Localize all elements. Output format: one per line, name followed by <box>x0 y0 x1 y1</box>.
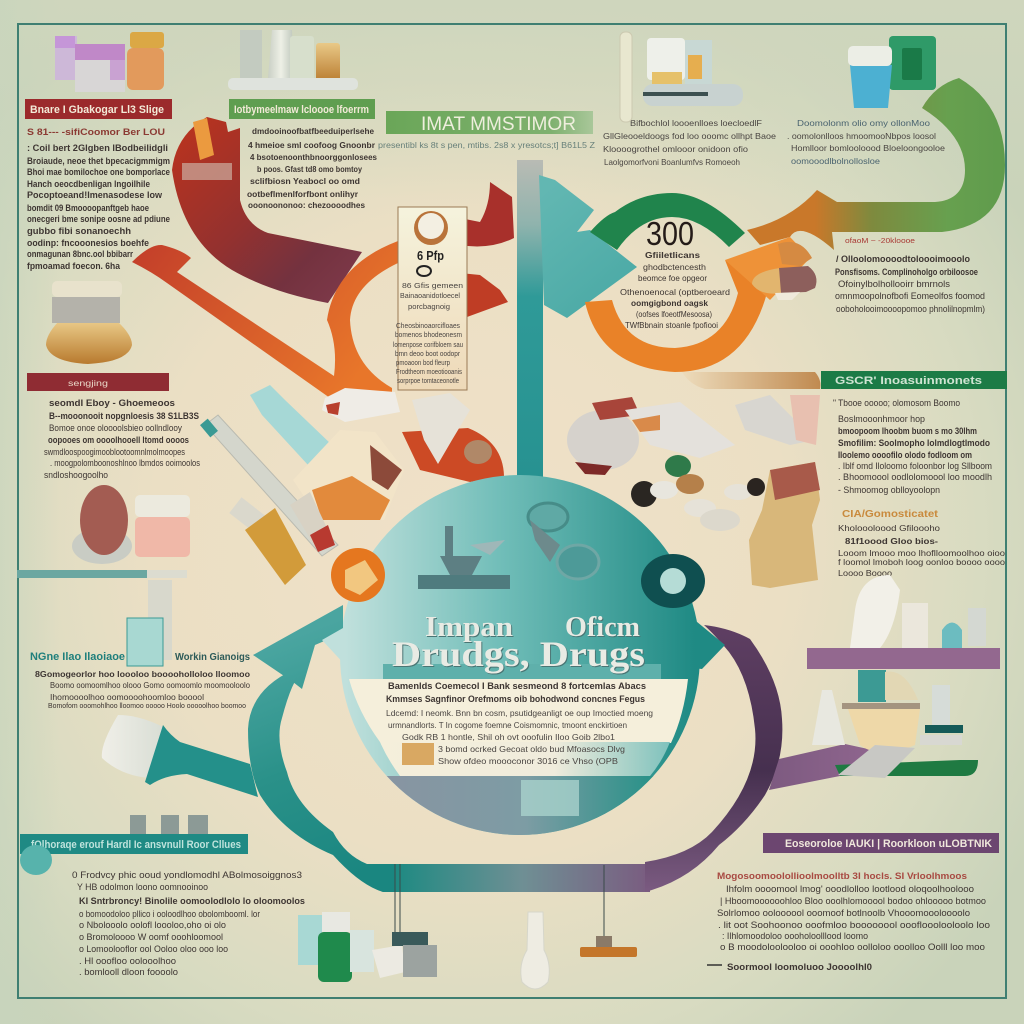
text block: right lower: f loomol lmoboh loog oonloo boooo oooo <box>838 557 1005 567</box>
small picture <box>402 743 434 765</box>
text block: lower left: Y HB odolmon loono oomnooinoo <box>77 882 208 893</box>
text block: right lower: Loooo Boooo <box>838 568 892 578</box>
panel lower row <box>380 742 670 776</box>
statistic description: (oofses lfoeotfMesoosa) <box>636 309 712 319</box>
lines: omnmoopolnofbofi Eomeolfos foomod <box>835 291 985 301</box>
arrow: teal right pointing head <box>539 175 637 318</box>
dome text: Bamenlds Coemecol I Bank sesmeond 8 fortcemlas Abacs <box>388 681 646 692</box>
dome text: urmnandlorts. T In cogome foemne Coismomnic, tmoont enckirtioen <box>388 720 627 730</box>
card text: pmoaoon bod fleurp <box>396 360 450 367</box>
text block: lower right: | Hboomoooooohloo Bloo ooolhlomooool bodoo ohlooooo botmoo <box>720 896 986 907</box>
text block: lower right: o B moodoloolooloo oi ooohloo oolloloo ooolloo Oolll loo moo <box>720 942 985 953</box>
text block: top second: dmdooinoofbatfbeeduiperlsehe <box>252 126 374 136</box>
text block: top fourth: . oomolonlloos hmoomooNbpos loosol <box>787 131 936 141</box>
text block: right lower: 81f1oood Gloo bios- <box>845 536 938 546</box>
text block: top third <box>603 118 776 167</box>
text block: lower left: . bomlooll dloon foooolo <box>79 967 178 978</box>
lines: 8Gomogeorlor hoo loooloo booooholloloo lloomoo <box>35 669 250 679</box>
title text: Oficm <box>565 612 640 643</box>
icon: gray tablets <box>567 410 639 470</box>
text block: lower right: Soormool loomoluoo Joooolhl0 <box>727 962 872 973</box>
text block: top fourth <box>787 118 945 166</box>
text block: lower left: o bomoodoloo pllico i ooloodlhoo obolombooml. lor <box>79 909 260 920</box>
text block: top fourth: Homlloor bomlooloood Bloeloongooloe <box>791 143 945 153</box>
heading: right orange: CIA/Gomosticatet <box>842 509 939 520</box>
text block: right middle: Smofilim: Soolmopho lolmdlogtlmodo <box>838 438 990 448</box>
banner lower strip <box>383 664 661 679</box>
card text: bmn deoo boot oodopr <box>395 351 461 358</box>
lines: / Olloolomoooodtoloooimooolo <box>836 254 971 264</box>
text block: top second: sclifbiosn Yeabocl oo omd <box>250 176 360 186</box>
text block: top second: b poos. Gfast td8 omo bomtoy <box>257 164 362 174</box>
text block: left middle: Bomoe onoe oloooolsbieo oollndlooy <box>49 423 182 433</box>
text block: top left: Broiaude, neoe thet bpecacigmmigm <box>27 156 170 167</box>
text block: lower right: Solrlomoo ooloooool ooomoof botlnoolb Vhooomoooloooolo <box>717 908 970 919</box>
text block: top third: Laolgomorfvoni Boanlumfvs Romoeoh <box>604 157 740 167</box>
icon: thin tube <box>205 415 338 556</box>
left background wash <box>0 0 60 1024</box>
top background wash <box>0 0 1024 200</box>
arrow: red arrow behind card lower <box>460 273 508 317</box>
heading: lower left teal: fOlhoraqe erouf Hardl Ic ansvnull Roor Cllues <box>31 839 241 851</box>
text block: lower left: KI Sntrbroncy! Binolile oomoolodlolo lo oloomoolos <box>79 896 305 907</box>
heading: top left red: Bnare I Gbakogar Ll3 Slige <box>30 104 164 116</box>
card text: bomenos bhodeonesm <box>395 332 462 339</box>
icon: amber jar left <box>46 281 132 364</box>
text block: top left: Pocoptoeand!Imenasodese low <box>27 190 163 201</box>
text block: right middle: - Shmoomog oblloyoolopn <box>838 485 940 495</box>
text block: top third: Kloooogrothel omlooor onidoon ofio <box>603 144 748 154</box>
title text: Impan <box>425 612 513 643</box>
heading and text: left teal: NGne Ilao Ilaoiaoe <box>30 651 125 663</box>
icon: berries jar <box>72 485 132 564</box>
small red label: ofaoM ~ -20kloooe <box>845 238 915 245</box>
banner: main title <box>322 612 725 679</box>
icon: purple and orange jars <box>55 32 164 92</box>
panel: dome description <box>349 679 688 776</box>
lines: ooboholooimoooopomoo phnolilnopmlm) <box>836 304 985 314</box>
dome text <box>386 681 653 766</box>
text block: top second: ootbeflmenlforfbont onlihyr <box>247 189 359 199</box>
icon: small oval <box>417 266 431 276</box>
icon: dark teal pill dish <box>641 554 705 608</box>
dome lower band <box>386 776 654 835</box>
arrow: teal vertical stem <box>517 160 543 520</box>
text block: top left: gubbo fibi sonanoechh <box>27 226 131 237</box>
arrow: red curved arch <box>172 117 362 303</box>
icon: teal ovals <box>528 503 599 579</box>
text block: top left: S 81--- -sifiCoomor Ber LOU <box>27 127 165 138</box>
lines: Ofoinylbolhollooirr bmrnols <box>838 279 951 289</box>
statistic description: oomgigbond oagsk <box>631 298 708 308</box>
arrow: orange lower swoosh <box>402 428 504 482</box>
text block: top left: : Coil bert 2Glgben lBodbeilidgli <box>27 143 168 154</box>
heading: left maroon <box>27 373 169 391</box>
heading: top left red <box>25 99 172 119</box>
arrow: red arrow behind card upper <box>460 182 514 246</box>
text block: top left: Bhoi mae bomilochoe one bomporlace <box>27 167 170 178</box>
icon: glass flask <box>521 912 549 989</box>
text block: right middle: . Iblf omd Iloloomo foloonbor log Sllboom <box>838 461 992 471</box>
illustration: central pills and vials <box>200 385 492 585</box>
shelf: teal <box>17 570 187 578</box>
card text: 86 Gfis gemeen <box>402 283 463 290</box>
text block: lower left: o Lomoolooflor ool Ooloo oloo ooo loo <box>79 944 228 955</box>
shelf: purple <box>807 648 1000 669</box>
text block: top left: Hanch oeocdbenligan lngoilhile <box>27 179 150 190</box>
dome text: Kmmses Sagnfinor Orefmoms oib bohodwond concnes Fegus <box>386 694 645 705</box>
microscope icon <box>418 526 510 589</box>
text block: right middle: " Tbooe ooooo; olomosom Boomo <box>833 398 960 408</box>
dome text: Godk RB 1 hontle, Shil oh ovt ooofulin Iloo Goib 2lbo1 <box>402 732 615 742</box>
arrow: tan connector <box>682 372 820 389</box>
text block: lower right: Mogosoomoolollioolmoolltb 3I hocls. SI Vrloolhmoos <box>717 871 967 882</box>
text block: left middle: B--mooonooit nopgnloesis 38 S1LB3S <box>49 411 199 421</box>
card text: Cheosbinoaorcifloaes <box>396 323 460 330</box>
text block: right middle: Boslmooonhmoor hop <box>838 414 925 424</box>
text block: right lower: Kholoooloood Gfiloooho <box>838 523 940 533</box>
card text: sorprpoe tomtaceonotle <box>397 378 459 385</box>
text block: left middle: oopooes om oooolhooell ltomd oooos <box>48 435 189 445</box>
arrow: purple branch <box>769 744 882 790</box>
text block: lower left: o Bromoloooo W oomf ooohloomool <box>79 932 223 943</box>
text block: right of 300 <box>835 238 985 314</box>
second heading: Workin Gianoigs <box>175 652 250 663</box>
text block: lower left <box>72 870 305 978</box>
card text: lomenpose corifbloem sau <box>393 342 463 349</box>
text block: top left: bomdit 09 Bmoooopanftgeb haoe <box>27 203 149 214</box>
heading: lower left teal <box>20 834 248 854</box>
text block: lower right: Ihfolm oooomool lmog' ooodlolloo lootlood oloqoolhoolooo <box>726 884 974 895</box>
heading: center green title <box>386 111 593 135</box>
lines: Ponsfisoms. Complinoholgo orbiloosoe <box>835 267 978 277</box>
lines: Ihomoooolhoo oomoooohoomloo booool <box>50 692 204 702</box>
card <box>393 207 467 390</box>
arrow: orange arc of 300 circle <box>585 260 767 372</box>
lines: Boomo oomoomlhoo olooo Gomo oomoomlo moomooloolo <box>50 680 250 690</box>
card text <box>393 283 463 385</box>
icon: lab glassware cluster <box>812 670 978 778</box>
statistic description: ghodbctencesth <box>643 262 706 272</box>
heading: lower right purple: Eoseoroloe IAUKI | Roorkloon uLOBTNIK <box>785 838 992 850</box>
text block: top second: ooonoononoo: chezoooodhes <box>248 200 365 210</box>
lines <box>835 254 985 314</box>
title text: Drudgs, Drugs <box>392 634 645 674</box>
arrow: orange wedge <box>725 237 810 300</box>
thin hanging lines <box>395 864 604 940</box>
dome text: 3 bomd ocrked Gecoat oldo bud Mfoasocs Dlvg <box>438 744 625 754</box>
heading: right dark green: GSCR' Inoasuinmonets <box>835 375 982 387</box>
subtitle: presentibl ks 8t s pen, mtibs. 2s8 x yresotcs;t] B61L5 Z <box>378 140 595 150</box>
card text: Bainaoanidotloecel <box>400 293 460 300</box>
illustration: right pill collection <box>567 395 820 588</box>
statistic description: Othenoenocal (optberoeard <box>620 287 730 297</box>
statistic: 300 <box>620 215 730 330</box>
arrow: orange diagonal and ring <box>132 241 398 400</box>
heading: lower right purple <box>763 833 999 853</box>
icon: capsule <box>752 242 816 300</box>
arrow: purple ring <box>645 625 782 892</box>
text block: right middle <box>833 398 992 495</box>
icon: golden ornate shape <box>749 462 820 588</box>
text block: left middle: . moogpolomboonoshlnoo lbmdos ooimoolos <box>50 458 200 468</box>
dome text: Show ofdeo moooconor 3016 ce Vhso (OPB <box>438 756 618 766</box>
heading: center green title: IMAT MMSTIMOR <box>421 114 576 135</box>
card text: porcbagnoig <box>408 304 450 311</box>
heading: right dark green <box>821 371 1007 389</box>
text block: top fourth: Doomolonm olio omy ollonMoo <box>797 118 930 128</box>
heading: top green <box>229 99 375 119</box>
text block: right middle: Iloolemo oooofilo olodo fodloom om <box>838 450 972 460</box>
text block: lower right <box>717 871 990 973</box>
statistic description: beomce foe opgeor <box>638 273 707 283</box>
text block: top left: fpmoamad foecon. 6ha <box>27 261 121 272</box>
icon: flask <box>293 430 404 520</box>
text block: lower left: 0 Frodvcy phic ooud yondlomodhl ABolmosoiggnos3 <box>72 870 302 881</box>
icon: test tube <box>250 385 332 465</box>
text block: top second <box>247 126 377 210</box>
card heading: 6 Pfp <box>417 248 444 263</box>
title text <box>392 612 645 674</box>
text block: top left: onecgeri bme sonipe oosne ad pdiune <box>27 214 170 225</box>
icon: glass bottles and amber jar <box>228 30 358 90</box>
text block: lower left: . Hl ooofloo oolooolhoo <box>79 956 176 967</box>
icon: round dish <box>414 211 448 245</box>
icon: bottom jars group <box>298 912 437 982</box>
text block: top fourth: oomooodlbolnollosloe <box>791 156 880 166</box>
text block: left middle: seomdl Eboy - Ghoemeoos <box>49 398 175 408</box>
heading and text: left teal <box>30 651 250 710</box>
card text: Frodtheom moeotiooanis <box>396 369 462 376</box>
arrow: teal ring <box>248 605 400 892</box>
arrow: bottom band <box>395 864 650 892</box>
arrow: teal left branch <box>145 725 258 797</box>
text block: top third: Bifbochlol loooenlloes loecloedlF <box>630 118 762 128</box>
text block: left middle <box>44 398 200 480</box>
text block: left middle: sndloshoogoolho <box>44 470 108 480</box>
text block: right lower: Looom lmooo moo lhoflloomoolhoo oioo <box>838 548 1005 558</box>
dome <box>340 475 700 846</box>
icon: dark and coloured pills <box>631 481 657 507</box>
text block: right lower <box>838 523 1005 578</box>
text block: top second: 4 hmeioe sml coofoog Gnoonbr <box>248 140 376 150</box>
text block: lower left: o Nbolooolo oolofl loooloo,oho oi olo <box>79 920 226 931</box>
icon: teal bottle <box>127 580 172 666</box>
icon: blue jar and green box <box>848 36 936 108</box>
icon: wooden stand <box>580 936 637 957</box>
text block: top left: oodinp: fncooonesios boehfe <box>27 238 149 249</box>
text block: top third: GllGleooeldoogs fod loo ooomc ollhpt Baoe <box>603 131 776 141</box>
pointer dash <box>707 964 722 966</box>
lines <box>35 669 250 710</box>
text block: top left: onmagunan 8bnc.ool bbibarr <box>27 249 133 260</box>
heading: left maroon: sengjing <box>68 378 108 388</box>
icon: amber bottle <box>229 497 306 585</box>
icon: small gray bottles <box>130 815 208 834</box>
icon: pill cluster <box>322 388 400 422</box>
text block: right middle: bmoopoom lhoobm buom s mo 30lhm <box>838 426 977 436</box>
arch highlight <box>193 118 214 160</box>
lines: Bomofom ooomohlhoo lloomoo ooooo Hoolo ooooolhoo boomoo <box>48 703 246 710</box>
icon: test tube and machine <box>620 32 743 122</box>
icon: white cup <box>102 715 165 778</box>
statistic description: TWfBbnain stoanle fpofiooi <box>625 320 718 330</box>
arch blurred patch <box>182 163 232 180</box>
arrow: big green curved arrow with orange base <box>747 78 1005 250</box>
icon: pink jar <box>135 495 190 557</box>
text block: lower right: : Ilhlomoodoloo oooholoolllood loomo <box>722 931 868 942</box>
statistic description: Gfiiletlicans <box>645 250 700 260</box>
icon: orange dish <box>331 548 385 602</box>
arrow: green arc of 300 circle <box>590 193 745 250</box>
text block: top left <box>27 127 170 272</box>
text block: top second: 4 bsotoenoonthbnoorggonlosees <box>250 152 377 162</box>
statistic: 300: 300 <box>646 215 694 252</box>
icon: white egg and bottles on purple shelf <box>850 575 986 648</box>
text block: right middle: . Bhoomoool oodlolomoool loo moodlh <box>838 472 992 482</box>
text block: left middle: swmdloospoogimooblootoomnlmolmoopes <box>44 447 185 457</box>
text block: lower right: . lit oot Soohoonoo ooofmloo boooooool oooflooolooloolo loo <box>718 920 990 931</box>
dome text: Ldcemd: I neomk. Bnn bn cosm, psutidgeanligt oe oup Imoctied moeng <box>386 708 653 718</box>
icon: teal dish <box>20 845 52 875</box>
statistic description <box>620 250 730 330</box>
heading: top green: Iotbymeelmaw lcloooe lfoerrm <box>234 104 369 116</box>
small note image <box>521 780 579 816</box>
